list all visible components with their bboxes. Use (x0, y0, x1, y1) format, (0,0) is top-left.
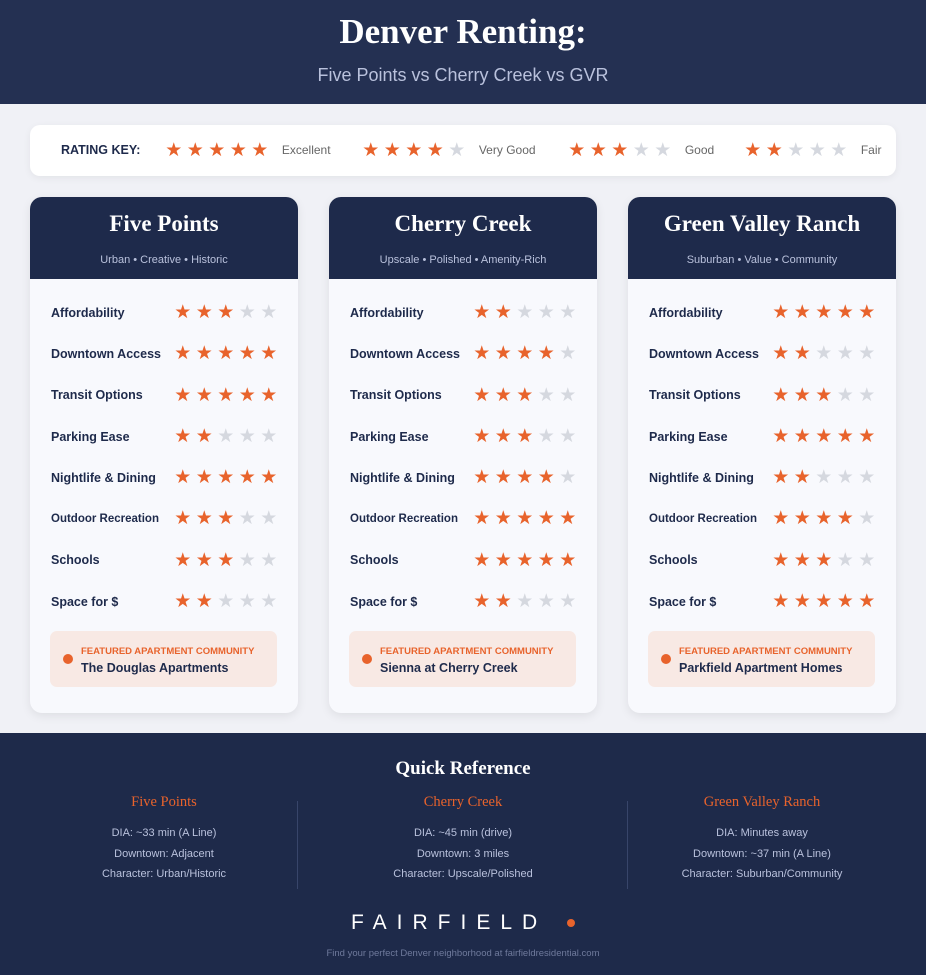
panel: Five Points: ★ (174, 507, 191, 529)
key very good: Very Good (479, 143, 536, 157)
ref: Five Points: Character: Urban/Historic (102, 868, 226, 880)
footer tagline: Find your perfect Denver neighborhood at fairfieldresidential.com (326, 948, 600, 959)
key label: RATING KEY: (61, 143, 140, 157)
panel: Green Valley Ranch: ★ (815, 301, 832, 323)
panel: Cherry Creek: ★ (559, 384, 576, 406)
panel: Cherry Creek: ★ (559, 342, 576, 364)
panel: Green Valley Ranch: ★ (815, 549, 832, 571)
key good: ★ (654, 139, 671, 161)
panel: Green Valley Ranch: ★ (837, 549, 854, 571)
key excellent: ★ (208, 139, 225, 161)
key excellent (165, 139, 331, 161)
panel: Cherry Creek: ★ (516, 342, 533, 364)
key fair (744, 139, 882, 161)
key good: ★ (611, 139, 628, 161)
panel: Five Points: ★ (260, 301, 277, 323)
panel: Green Valley Ranch: Space for $ (649, 595, 716, 609)
panel: Cherry Creek: ★ (516, 466, 533, 488)
ref: Cherry Creek: Character: Upscale/Polished (393, 868, 533, 880)
panel: Five Points: Nightlife & Dining (51, 471, 156, 485)
panel: Five Points: ★ (260, 590, 277, 612)
ref: Green Valley Ranch: DIA: Minutes away (716, 827, 808, 839)
panel: Five Points: ★ (174, 301, 191, 323)
panel: Five Points: ★ (217, 466, 234, 488)
panel: Green Valley Ranch: ★ (858, 590, 875, 612)
panel: Cherry Creek: ★ (538, 466, 555, 488)
panel: Green Valley Ranch: ★ (815, 507, 832, 529)
panel: Cherry Creek: ★ (538, 549, 555, 571)
panel: Green Valley Ranch: Downtown Access (649, 347, 759, 361)
panel: Five Points: ★ (196, 549, 213, 571)
header (0, 0, 926, 104)
panel: Five Points: ★ (239, 425, 256, 447)
key very good: ★ (384, 139, 401, 161)
panel: Green Valley Ranch: ★ (772, 466, 789, 488)
panel: Five Points: ★ (217, 301, 234, 323)
panel: Green Valley Ranch: ★ (772, 342, 789, 364)
panel: Green Valley Ranch: ★ (858, 425, 875, 447)
key excellent: Excellent (282, 143, 331, 157)
panel: Green Valley Ranch: ★ (837, 507, 854, 529)
key very good: ★ (362, 139, 379, 161)
panel: Green Valley Ranch: ★ (858, 342, 875, 364)
panel: Cherry Creek: ★ (473, 466, 490, 488)
panel: Green Valley Ranch: ★ (815, 384, 832, 406)
panel: Green Valley Ranch: Parking Ease (649, 430, 728, 444)
panel: Five Points: ★ (260, 384, 277, 406)
panel: Five Points: ★ (217, 549, 234, 571)
featured: Cherry Creek: Sienna at Cherry Creek (380, 661, 518, 675)
panel: Five Points: Urban • Creative • Historic (100, 254, 228, 266)
panel: Cherry Creek: ★ (495, 590, 512, 612)
panel: Cherry Creek: ★ (495, 425, 512, 447)
panel: Green Valley Ranch (628, 197, 896, 713)
key very good (362, 139, 536, 161)
panel: Cherry Creek: Parking Ease (350, 430, 429, 444)
panel: Green Valley Ranch: Nightlife & Dining (649, 471, 754, 485)
panel: Green Valley Ranch: ★ (837, 466, 854, 488)
panel: Cherry Creek: Nightlife & Dining (350, 471, 455, 485)
panel: Five Points: ★ (174, 384, 191, 406)
panel: Green Valley Ranch: Green Valley Ranch (664, 211, 860, 236)
panel: Green Valley Ranch: ★ (794, 425, 811, 447)
panel: Cherry Creek: ★ (516, 590, 533, 612)
key good: ★ (568, 139, 585, 161)
key excellent: ★ (251, 139, 268, 161)
panel: Five Points: Downtown Access (51, 347, 161, 361)
panel: Five Points: ★ (260, 425, 277, 447)
panel: Cherry Creek: Downtown Access (350, 347, 460, 361)
panel: Green Valley Ranch: ★ (772, 384, 789, 406)
panel: Five Points: ★ (239, 466, 256, 488)
panel: Green Valley Ranch: ★ (794, 466, 811, 488)
panel: Cherry Creek: ★ (473, 342, 490, 364)
panel: Green Valley Ranch: ★ (858, 384, 875, 406)
panel: Cherry Creek: ★ (473, 425, 490, 447)
panel: Green Valley Ranch: ★ (772, 425, 789, 447)
panel: Cherry Creek: ★ (495, 301, 512, 323)
key fair: ★ (830, 139, 847, 161)
panel: Five Points: ★ (239, 342, 256, 364)
panel: Green Valley Ranch: Outdoor Recreation (649, 513, 757, 525)
panel: Five Points: ★ (174, 425, 191, 447)
panel: Green Valley Ranch: Affordability (649, 306, 723, 320)
panel: Green Valley Ranch: ★ (772, 549, 789, 571)
panel: Green Valley Ranch: ★ (837, 590, 854, 612)
panel: Five Points: Schools (51, 553, 100, 567)
panel: Cherry Creek: ★ (559, 549, 576, 571)
title: Denver Renting: (339, 12, 587, 51)
featured: Cherry Creek: FEATURED APARTMENT COMMUNITY (380, 646, 553, 657)
panel: Five Points: ★ (196, 590, 213, 612)
panel: Cherry Creek: ★ (495, 342, 512, 364)
panel: Cherry Creek: ★ (538, 301, 555, 323)
ref: Cherry Creek: Downtown: 3 miles (417, 848, 509, 860)
ref: Cherry Creek: Cherry Creek (424, 794, 502, 810)
panel: Five Points: ★ (239, 384, 256, 406)
ref: Green Valley Ranch: Character: Suburban/Community (682, 868, 842, 880)
panel: Five Points: ★ (217, 507, 234, 529)
key fair: ★ (744, 139, 761, 161)
panel: Cherry Creek: Affordability (350, 306, 424, 320)
panel: Cherry Creek: ★ (559, 301, 576, 323)
panel: Five Points: ★ (217, 590, 234, 612)
rating key (30, 125, 896, 176)
panel: Green Valley Ranch: ★ (794, 342, 811, 364)
panel: Five Points: Affordability (51, 306, 125, 320)
ref: Cherry Creek: DIA: ~45 min (drive) (414, 827, 512, 839)
panel: Five Points: ★ (196, 384, 213, 406)
panel: Cherry Creek: ★ (559, 466, 576, 488)
featured: Green Valley Ranch (648, 631, 875, 687)
ref: Five Points: Five Points (131, 794, 197, 810)
panel: Green Valley Ranch: ★ (858, 507, 875, 529)
panel: Five Points: Space for $ (51, 595, 118, 609)
ref: Five Points: Downtown: Adjacent (114, 848, 214, 860)
panel: Five Points: ★ (217, 342, 234, 364)
panel: Cherry Creek: ★ (473, 590, 490, 612)
featured: Five Points: The Douglas Apartments (81, 661, 228, 675)
panel: Five Points: ★ (260, 342, 277, 364)
panel: Cherry Creek: ★ (495, 466, 512, 488)
panel: Five Points: Five Points (109, 211, 219, 236)
logo: Fairfield: FAIRFIELD (351, 911, 547, 934)
panel: Five Points: ★ (174, 466, 191, 488)
panel: Five Points (30, 197, 298, 713)
subtitle: Five Points vs Cherry Creek vs GVR (317, 65, 609, 85)
ref: Green Valley Ranch: Green Valley Ranch (704, 794, 820, 810)
panel: Cherry Creek: ★ (559, 590, 576, 612)
panel: Cherry Creek: ★ (495, 507, 512, 529)
panel: Green Valley Ranch: ★ (858, 301, 875, 323)
ref: Green Valley Ranch (682, 794, 842, 880)
panel: Five Points: ★ (196, 466, 213, 488)
panel: Five Points: ★ (260, 507, 277, 529)
panel: Five Points: Outdoor Recreation (51, 513, 159, 525)
panel: Five Points: ★ (239, 301, 256, 323)
panel: Green Valley Ranch: ★ (794, 590, 811, 612)
panel: Green Valley Ranch: ★ (815, 590, 832, 612)
ref: Five Points (102, 794, 226, 880)
panel: Green Valley Ranch: ★ (794, 507, 811, 529)
panel: Green Valley Ranch: ★ (772, 507, 789, 529)
featured: Green Valley Ranch: FEATURED APARTMENT COMMUNITY (679, 646, 852, 657)
panel: Cherry Creek: Upscale • Polished • Amenity-Rich (380, 254, 546, 266)
panel: Green Valley Ranch: ★ (794, 384, 811, 406)
panel: Cherry Creek: ★ (559, 425, 576, 447)
quick reference heading: Quick Reference (395, 758, 531, 779)
panel: Cherry Creek: ★ (516, 549, 533, 571)
panel: Cherry Creek: ★ (516, 507, 533, 529)
key good (568, 139, 714, 161)
key fair: ★ (787, 139, 804, 161)
panel: Green Valley Ranch: Schools (649, 553, 698, 567)
panel: Green Valley Ranch: ★ (837, 301, 854, 323)
key good: ★ (633, 139, 650, 161)
panel: Green Valley Ranch: ★ (858, 549, 875, 571)
panel: Cherry Creek: ★ (495, 384, 512, 406)
panel: Green Valley Ranch: ★ (815, 342, 832, 364)
panel: Cherry Creek: Space for $ (350, 595, 417, 609)
panel: Green Valley Ranch: Transit Options (649, 388, 741, 402)
featured: Green Valley Ranch: Parkfield Apartment Homes (679, 661, 842, 675)
key good: ★ (590, 139, 607, 161)
panel: Cherry Creek: ★ (538, 384, 555, 406)
panel: Five Points: Transit Options (51, 388, 143, 402)
panel: Cherry Creek: ★ (538, 507, 555, 529)
key excellent: ★ (230, 139, 247, 161)
panel: Green Valley Ranch: ★ (794, 301, 811, 323)
panel: Cherry Creek: ★ (559, 507, 576, 529)
panel: Five Points: ★ (196, 342, 213, 364)
panel: Cherry Creek: ★ (516, 301, 533, 323)
panel: Green Valley Ranch: ★ (815, 425, 832, 447)
key excellent: ★ (165, 139, 182, 161)
panel: Green Valley Ranch: ★ (794, 549, 811, 571)
key good: Good (685, 143, 714, 157)
panel: Green Valley Ranch: ★ (772, 301, 789, 323)
panel: Five Points: ★ (260, 466, 277, 488)
panel: Cherry Creek: ★ (538, 590, 555, 612)
key fair: ★ (809, 139, 826, 161)
panel: Five Points: ★ (196, 301, 213, 323)
ref: Cherry Creek (393, 794, 533, 880)
panel: Cherry Creek: ★ (473, 301, 490, 323)
key excellent: ★ (187, 139, 204, 161)
panel: Cherry Creek: ★ (538, 425, 555, 447)
ref: Green Valley Ranch: Downtown: ~37 min (A Line) (693, 848, 831, 860)
featured: Five Points: FEATURED APARTMENT COMMUNITY (81, 646, 254, 657)
panel: Cherry Creek: ★ (473, 384, 490, 406)
panel: Five Points: ★ (174, 590, 191, 612)
panel: Cherry Creek: ★ (473, 549, 490, 571)
panel: Cherry Creek: Outdoor Recreation (350, 513, 458, 525)
panel: Five Points: ★ (217, 384, 234, 406)
panel: Green Valley Ranch: ★ (815, 466, 832, 488)
panel: Five Points: ★ (239, 549, 256, 571)
featured: Cherry Creek (349, 631, 576, 687)
panel: Five Points: ★ (260, 549, 277, 571)
panel: Five Points: ★ (196, 507, 213, 529)
panel: Cherry Creek (329, 197, 597, 713)
panel: Cherry Creek: ★ (495, 549, 512, 571)
key very good: ★ (427, 139, 444, 161)
panel: Five Points: Parking Ease (51, 430, 130, 444)
panel: Five Points: ★ (196, 425, 213, 447)
panel: Cherry Creek: ★ (516, 384, 533, 406)
panel: Cherry Creek: ★ (473, 507, 490, 529)
panel: Green Valley Ranch: ★ (837, 425, 854, 447)
key very good: ★ (448, 139, 465, 161)
panel: Cherry Creek: ★ (538, 342, 555, 364)
panel: Cherry Creek: Transit Options (350, 388, 442, 402)
panel: Five Points: ★ (239, 507, 256, 529)
key very good: ★ (405, 139, 422, 161)
panel: Green Valley Ranch: Suburban • Value • Community (687, 254, 837, 266)
ref: Five Points: DIA: ~33 min (A Line) (112, 827, 216, 839)
panel: Cherry Creek: ★ (516, 425, 533, 447)
panel: Cherry Creek: Schools (350, 553, 399, 567)
panel: Green Valley Ranch: ★ (837, 342, 854, 364)
featured: Five Points (50, 631, 277, 687)
panel: Green Valley Ranch: ★ (772, 590, 789, 612)
panel: Cherry Creek: Cherry Creek (395, 211, 531, 236)
key fair: ★ (766, 139, 783, 161)
panel: Five Points: ★ (174, 342, 191, 364)
panel: Five Points: ★ (239, 590, 256, 612)
panel: Five Points: ★ (217, 425, 234, 447)
panel: Green Valley Ranch: ★ (858, 466, 875, 488)
panel: Green Valley Ranch: ★ (837, 384, 854, 406)
key fair: Fair (861, 143, 882, 157)
panel: Five Points: ★ (174, 549, 191, 571)
footer: quick reference (0, 733, 926, 975)
